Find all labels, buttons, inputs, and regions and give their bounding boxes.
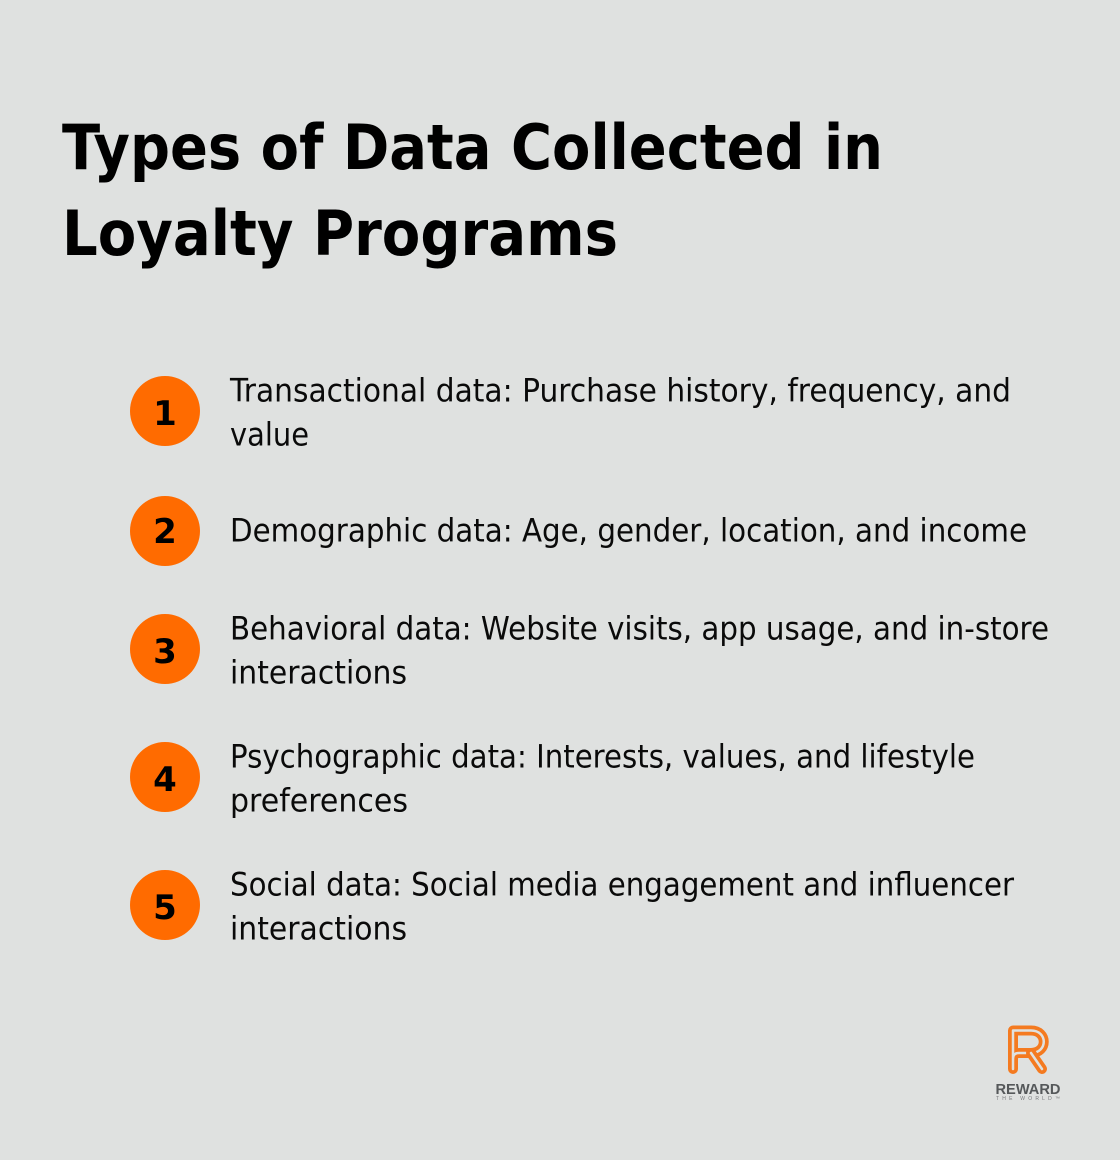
logo tagline: THE WORLD™ (996, 1096, 1060, 1102)
item 4: preferences (230, 782, 408, 820)
item 3: Behavioral data: Website visits, app usage, and in-store (230, 610, 1049, 648)
item 4: 4 (153, 760, 177, 800)
item 5: interactions (230, 910, 407, 948)
title: Loyalty Programs (62, 197, 618, 270)
item 1: value (230, 416, 309, 454)
item 1: Transactional data: Purchase history, frequency, and (229, 372, 1011, 410)
item 1: 1 (153, 394, 177, 434)
logo: Reward the World (996, 1030, 1061, 1102)
item 3: interactions (230, 654, 407, 692)
logo wordmark: REWARD (996, 1081, 1061, 1098)
list of data types (130, 372, 1049, 948)
item 5: Social data: Social media engagement and influencer (230, 866, 1015, 904)
icon: R mark (1013, 1030, 1044, 1069)
item 5: 5 (153, 888, 177, 928)
item 2 (130, 496, 1027, 566)
title: Types of Data Collected in (62, 111, 883, 184)
item 4: Psychographic data: Interests, values, and lifestyle (230, 738, 975, 776)
item 2: 2 (153, 512, 177, 552)
item 5 (130, 866, 1015, 948)
item 4 (130, 738, 975, 820)
title (62, 111, 883, 270)
item 3 (130, 610, 1049, 692)
item 2: Demographic data: Age, gender, location, and income (230, 512, 1027, 550)
item 1 (130, 372, 1011, 454)
item 3: 3 (153, 632, 177, 672)
